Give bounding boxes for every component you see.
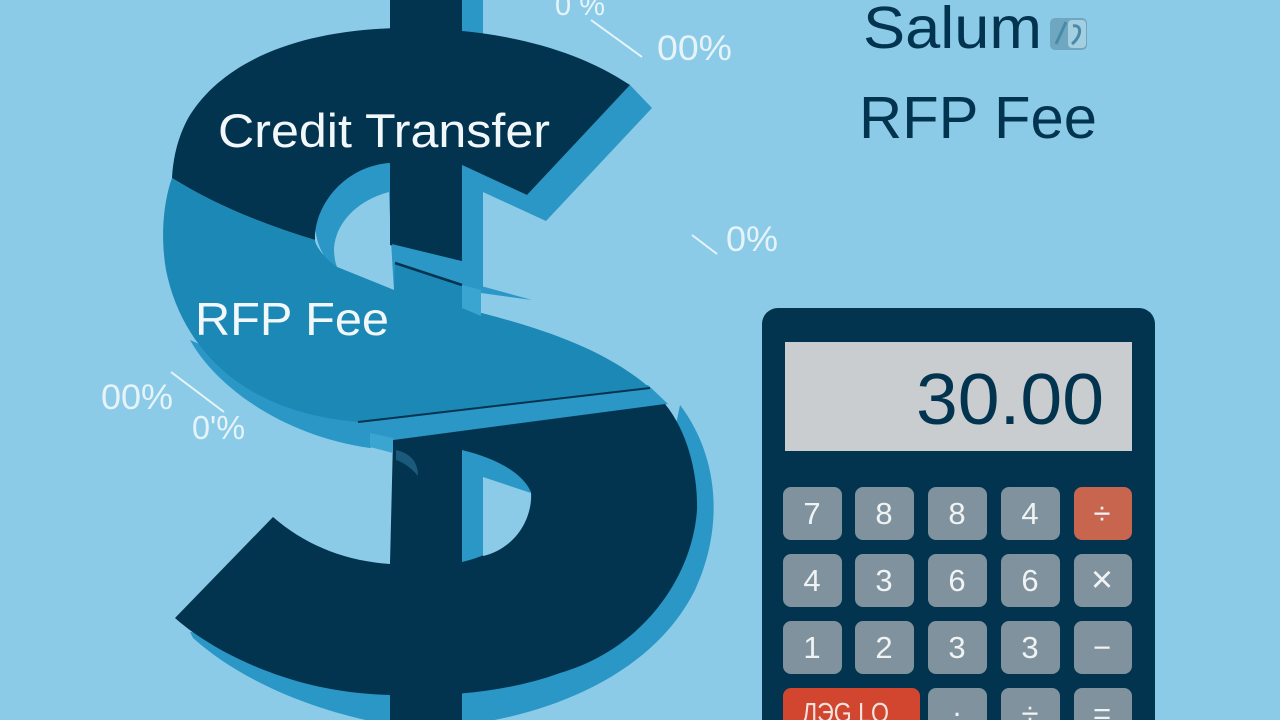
keypad row 2: 3	[875, 563, 893, 598]
label: Credit Transfer: Credit Transfer	[218, 104, 550, 157]
callout: left percent	[101, 372, 245, 446]
light block at bar top	[370, 433, 393, 453]
lower right extrusion	[190, 405, 714, 720]
keypad row 3: 3	[1021, 630, 1039, 665]
callout: right percent	[692, 220, 778, 259]
callout: left percent: 0'%	[192, 409, 245, 446]
inner curve extrusion	[315, 163, 395, 292]
light fold highlight	[462, 285, 481, 316]
lower blue slice extrusion	[190, 340, 668, 448]
top dollar bar	[390, 0, 462, 40]
callout: top percent: 00%	[657, 29, 732, 68]
label: RFP Fee on slice: RFP Fee	[195, 293, 389, 345]
keypad row 2: 6	[1021, 563, 1039, 598]
upper arm extrusion	[462, 85, 652, 292]
keypad row 1	[783, 487, 1132, 540]
bar shading	[396, 450, 418, 476]
keypad row 3: 3	[948, 630, 966, 665]
calculator	[762, 308, 1155, 720]
counter cut-out	[334, 192, 394, 290]
thin fold wedge	[481, 286, 532, 300]
keypad row 1: 8	[948, 496, 966, 531]
calculator body	[762, 308, 1155, 720]
keypad row 4	[783, 688, 1132, 720]
blue strip under top bar	[392, 244, 462, 285]
keypad row 2: 6	[948, 563, 966, 598]
icon: blurred glyph	[1050, 18, 1087, 50]
callout: right percent: 0%	[726, 220, 778, 259]
keypad row 2: 4	[803, 563, 821, 598]
bottom counter cut-out	[483, 477, 531, 556]
slice: RFP Fee	[163, 178, 650, 422]
keypad row 2	[783, 554, 1132, 607]
dollar sign pie chart	[163, 0, 714, 720]
calculator screen	[785, 342, 1132, 451]
bottom counter extrusion	[462, 450, 531, 562]
keypad row 3: −	[1093, 630, 1111, 665]
dark crease line	[395, 263, 462, 285]
slice divider line	[358, 388, 650, 422]
keypad row 1: 7	[803, 496, 821, 531]
slice: Credit Transfer	[172, 28, 630, 262]
keypad row 1: 4	[1021, 496, 1039, 531]
keypad row 1: ÷	[1093, 496, 1111, 531]
bar lower part	[390, 163, 462, 261]
top bar extrusion	[460, 0, 483, 40]
screen value: 30.00	[916, 360, 1104, 440]
keypad row 3	[783, 621, 1132, 674]
callout: top percent	[555, 0, 732, 68]
keypad row 3: 2	[875, 630, 893, 665]
keypad row 3: 1	[803, 630, 821, 665]
keypad row 2: ×	[1091, 559, 1113, 601]
bottom bar	[390, 560, 462, 720]
bottom dark S curve	[175, 404, 697, 696]
heading: RFP Fee: RFP Fee	[859, 85, 1097, 151]
keypad row 1: 8	[875, 496, 893, 531]
callout: left percent: 00%	[101, 378, 173, 417]
